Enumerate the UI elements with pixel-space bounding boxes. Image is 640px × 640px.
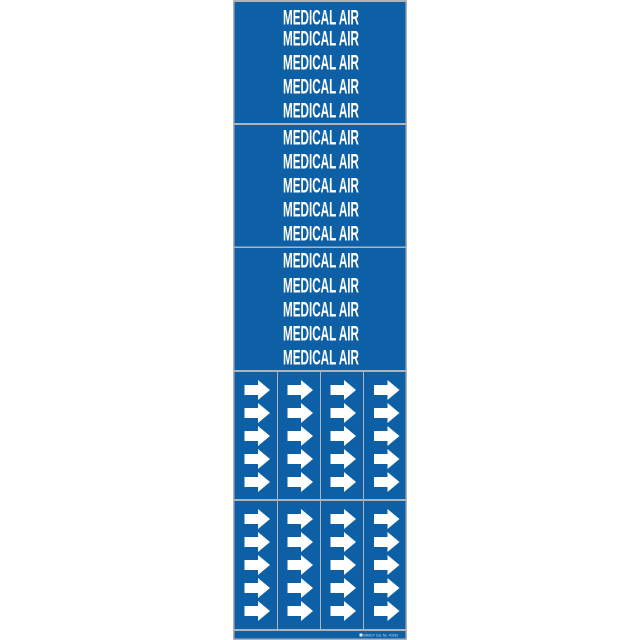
arrows, column 2: [288, 380, 313, 492]
label lines, strip 3: MEDICAL AIR: [283, 274, 359, 298]
panel: marker strip 3: [234, 248, 406, 370]
brand and catalog number: BRADY Cat. No. 40393: [364, 633, 399, 638]
arrows, column 1: [244, 509, 270, 621]
panel: marker strip 1: [234, 2, 406, 123]
sheet backing: [233, 0, 407, 640]
arrows, column 4: [374, 380, 400, 492]
panel: footer strip: [234, 631, 406, 638]
arrows, column 4: [374, 509, 400, 621]
label lines, strip 1: MEDICAL AIR: [283, 98, 359, 122]
label lines, strip 1: MEDICAL AIR: [283, 26, 359, 50]
label lines, strip 1: [283, 6, 359, 122]
panel: arrow block 1: [234, 372, 406, 499]
label lines, strip 2: MEDICAL AIR: [283, 174, 359, 198]
arrows, column 3: [330, 380, 356, 492]
label lines, strip 2: MEDICAL AIR: [283, 198, 359, 222]
icon: brand logo block: [360, 634, 362, 636]
arrows, column 3: [330, 509, 356, 621]
arrows, column 2: [288, 509, 313, 621]
label lines, strip 2: MEDICAL AIR: [283, 222, 359, 246]
label lines, strip 3: MEDICAL AIR: [283, 298, 359, 322]
label lines, strip 3: [283, 248, 359, 370]
arrows, column 1: [244, 380, 270, 492]
label lines, strip 3: MEDICAL AIR: [283, 248, 359, 272]
label lines, strip 2: MEDICAL AIR: [283, 150, 359, 174]
label lines, strip 2: [283, 126, 359, 246]
label lines, strip 3: MEDICAL AIR: [283, 346, 359, 370]
panel: arrow block 2: [234, 501, 406, 629]
label lines, strip 1: MEDICAL AIR: [283, 74, 359, 98]
panel: marker strip 2: [234, 125, 406, 246]
label lines, strip 1: MEDICAL AIR: [283, 6, 359, 30]
label lines, strip 3: MEDICAL AIR: [283, 322, 359, 346]
label lines, strip 2: MEDICAL AIR: [283, 126, 359, 150]
label lines, strip 1: MEDICAL AIR: [283, 50, 359, 74]
